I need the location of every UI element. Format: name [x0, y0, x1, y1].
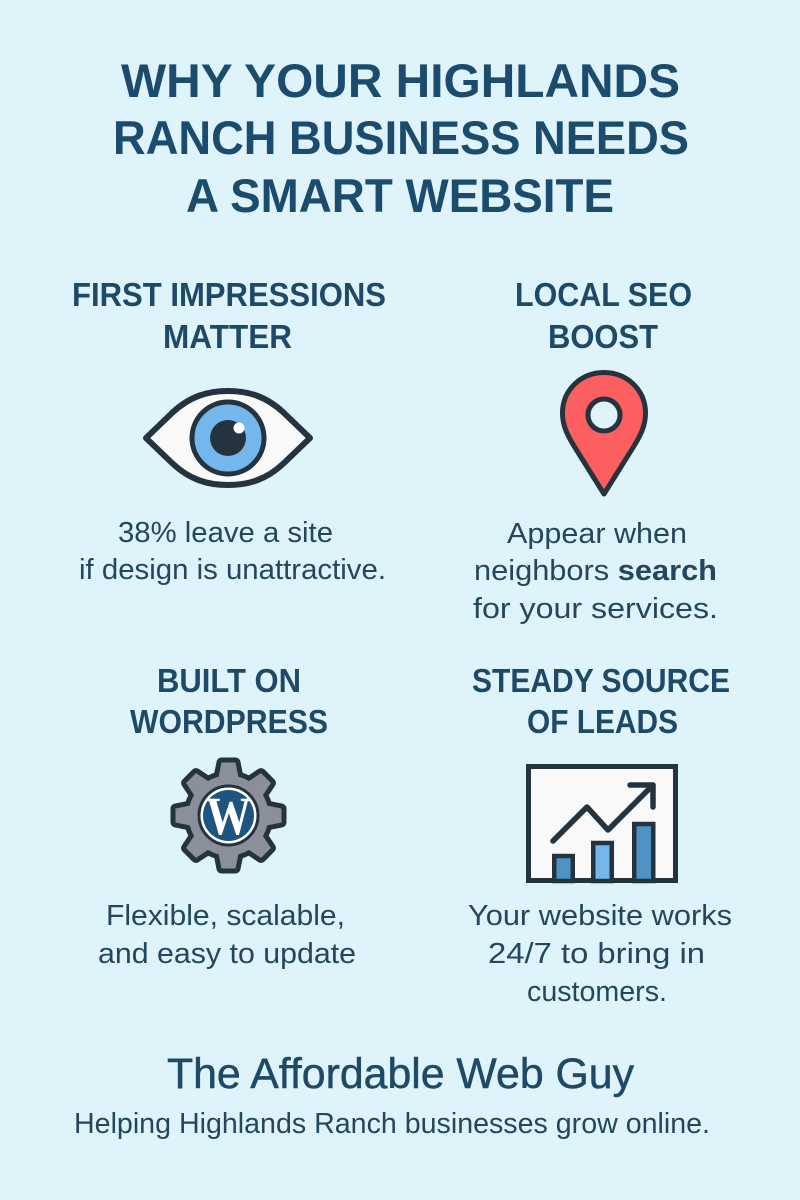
heading: steady source of leads: OF LEADS [527, 703, 678, 740]
text: appear when neighbors search: neighbors search [474, 555, 717, 587]
icon: eye [146, 391, 310, 485]
footer tagline: Helping Highlands Ranch businesses grow online. [74, 1108, 710, 1140]
panel: built on wordpress [98, 662, 356, 970]
heading: local seo boost: BOOST [548, 318, 658, 355]
text: flexible and scalable: and easy to update [98, 938, 356, 970]
text: 38% statistic: 38% leave a site [118, 517, 333, 549]
text: works 24/7: customers. [527, 976, 667, 1008]
title: RANCH BUSINESS NEEDS [113, 111, 689, 164]
heading: first impressions matter [72, 276, 386, 355]
text: appear when neighbors search: for your services. [473, 593, 718, 625]
panel: local seo [473, 276, 718, 625]
icon: wordpress gear: W [206, 786, 251, 846]
heading: steady source of leads [472, 662, 730, 740]
heading: steady source of leads: STEADY SOURCE [472, 662, 730, 699]
text: 38% statistic: if design is unattractive. [79, 554, 386, 586]
text: works 24/7: 24/7 to bring in [488, 938, 705, 970]
panel: first impressions [72, 276, 386, 586]
text: 38% statistic [79, 517, 386, 586]
heading: built on wordpress [130, 662, 328, 740]
icon: map pin [562, 372, 646, 494]
heading: built on wordpress: BUILT ON [157, 662, 301, 699]
title: A SMART WEBSITE [186, 169, 614, 222]
heading: local seo boost [515, 276, 692, 355]
icon: growth chart [528, 766, 676, 881]
text: flexible and scalable [98, 900, 356, 970]
heading: local seo boost: LOCAL SEO [515, 276, 692, 313]
text: flexible and scalable: Flexible, scalable, [106, 900, 345, 932]
heading: first impressions matter: FIRST IMPRESSIONS [72, 276, 386, 313]
heading: built on wordpress: WORDPRESS [130, 703, 328, 740]
icon: wordpress gear [176, 762, 282, 868]
text: appear when neighbors search [473, 518, 718, 625]
title [113, 54, 689, 222]
footer brand name: The Affordable Web Guy [167, 1050, 634, 1098]
text: works 24/7 [468, 900, 732, 1008]
heading: first impressions matter: MATTER [163, 318, 292, 355]
text: works 24/7: Your website works [468, 900, 732, 932]
panel: steady source of leads [468, 662, 732, 1008]
title: WHY YOUR HIGHLANDS [121, 54, 680, 107]
text: appear when neighbors search: Appear when [507, 518, 687, 550]
